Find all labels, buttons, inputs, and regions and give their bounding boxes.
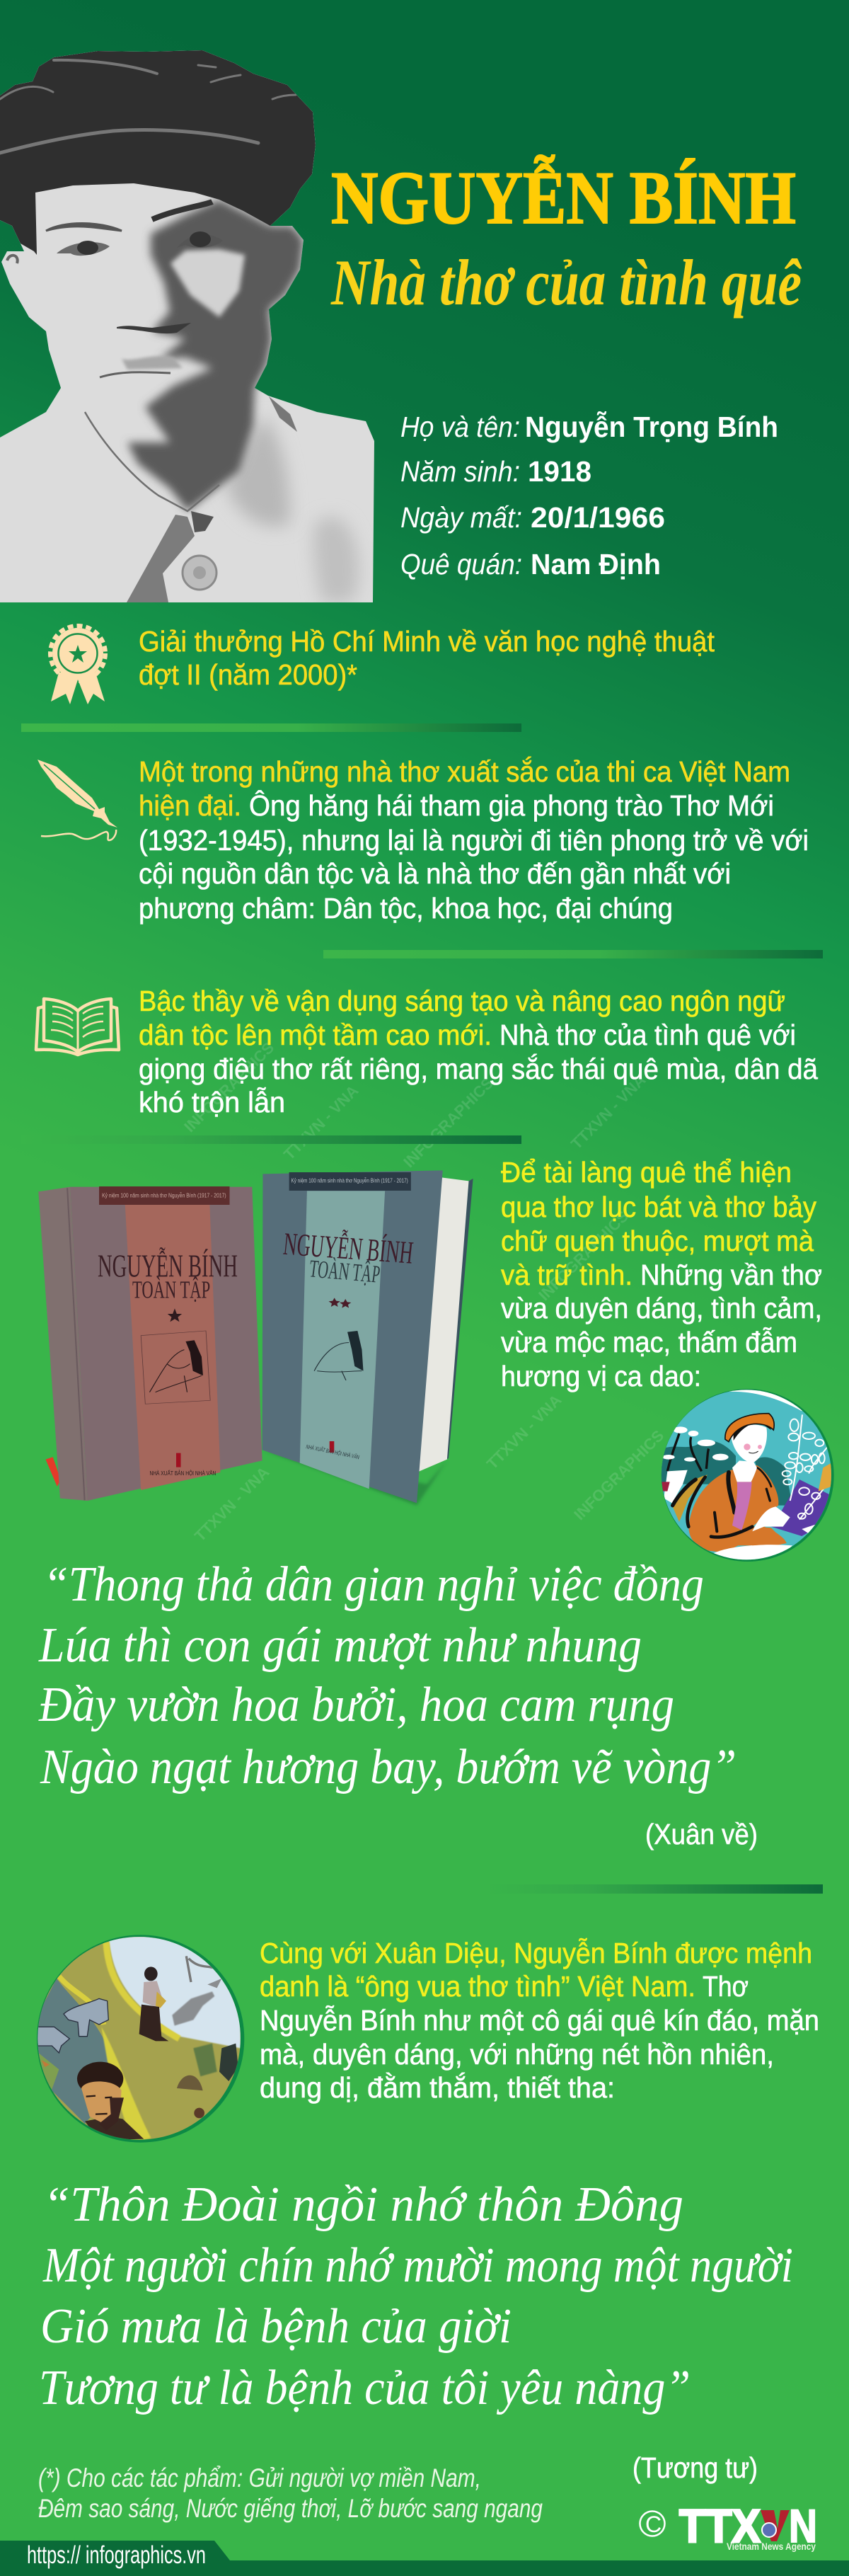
book volume 2: NGUYỄN BÍNH — [282, 1225, 415, 1271]
portrait of Nguyễn Bính — [0, 42, 382, 609]
icon: open book — [36, 999, 119, 1055]
paragraph: language master: khó trộn lẫn — [139, 1086, 285, 1118]
books: Nguyễn Bính toàn tập — [38, 1170, 473, 1506]
watermarks — [180, 1038, 667, 1545]
footer bar — [0, 2541, 849, 2576]
paragraph: king of love poetry: mà, duyên dáng, với những nét hồn nhiên, — [260, 2038, 774, 2071]
book volume 1: NGUYỄN BÍNH — [98, 1247, 238, 1283]
logo: TTXVN Vietnam News Agency: N — [789, 2500, 817, 2552]
book volume 2: TOÀN TẬP — [308, 1254, 381, 1288]
illustration: woman in round frame — [658, 1385, 837, 1562]
button — [183, 556, 216, 590]
paragraph: king of love poetry: Thơ — [703, 1970, 749, 2003]
logo: TTXVN Vietnam News Agency: TTX — [679, 2500, 761, 2552]
poem: Xuân về: Đầy vườn hoa bưởi, hoa cam rụng — [38, 1678, 674, 1732]
watermarks: TTXVN - VNA — [191, 1463, 272, 1545]
paragraph: modern poet — [139, 755, 809, 925]
shirt shading — [226, 418, 359, 602]
personal information: Họ và tên: — [400, 411, 520, 443]
footnote: Đêm sao sáng, Nước giếng thơi, Lỡ bước sang ngang — [38, 2494, 543, 2523]
left ear detail — [7, 256, 18, 263]
watermarks: INFOGRAPHICS — [570, 1426, 667, 1523]
paragraph: village theme: và trữ tình. — [501, 1259, 633, 1291]
poem: Tương tư: Tương tư là bệnh của tôi yêu nàng” — [39, 2361, 691, 2415]
paragraph: language master — [139, 985, 818, 1118]
paragraph: village theme: qua thơ lục bát và thơ bảy — [501, 1191, 816, 1223]
paragraph: modern poet: phương châm: Dân tộc, khoa học, đại chúng — [139, 892, 673, 925]
divider — [21, 1135, 521, 1144]
paragraph: village theme: Để tài làng quê thể hiện — [501, 1156, 792, 1189]
watermarks: TTXVN - VNA — [567, 1071, 649, 1152]
poem source: Tương tư: (Tương tư) — [633, 2451, 758, 2484]
paragraph: village theme — [501, 1156, 822, 1392]
face shadow — [127, 200, 304, 511]
paragraph: modern poet: hiện đại. — [139, 789, 241, 822]
divider — [487, 1884, 823, 1894]
personal information — [400, 411, 778, 580]
poem: Xuân về: “Thong thả dân gian nghỉ việc đồng — [43, 1557, 704, 1612]
paragraph: village theme: vừa mộc mạc, thấm đẫm — [501, 1326, 797, 1358]
paragraph: language master: Nhà thơ của tình quê với — [499, 1019, 796, 1051]
hat folds — [0, 60, 296, 153]
footnote: (*) Cho các tác phẩm: Gửi người vợ miền Nam, — [38, 2463, 481, 2492]
personal information: Năm sinh: — [400, 455, 520, 488]
tie — [127, 515, 195, 602]
poem source: Xuân về: (Xuân về) — [645, 1818, 758, 1850]
book volume 1: NHÀ XUẤT BẢN HỘI NHÀ VĂN — [149, 1470, 216, 1477]
logo: TTXVN Vietnam News Agency — [640, 2500, 817, 2552]
logo: TTXVN Vietnam News Agency: Vietnam News Agency — [727, 2541, 816, 2552]
poem: Tương tư: Gió mưa là bệnh của giời — [40, 2299, 512, 2354]
divider — [323, 950, 823, 958]
book volume 1: Kỷ niệm 100 năm sinh nhà thơ Nguyễn Bính (1917 - 2017) — [102, 1193, 226, 1198]
icon: feather quill — [37, 760, 117, 840]
footnote — [38, 2463, 543, 2523]
divider — [21, 723, 521, 732]
paragraph: modern poet: cội nguồn dân tộc và là nhà thơ đến gần nhất với — [139, 857, 731, 890]
book volume 2: NHÀ XUẤT BẢN HỘI NHÀ VĂN — [305, 1443, 361, 1460]
footer url: https:// infographics.vn — [27, 2541, 206, 2569]
hat — [0, 50, 316, 255]
paragraph: modern poet: (1932-1945), nhưng lại là người đi tiên phong trở về với — [139, 824, 809, 857]
watermarks: TTXVN - VNA — [483, 1391, 565, 1472]
logo: TTXVN Vietnam News Agency: C — [645, 2512, 662, 2537]
paragraph: village theme: hương vị ca dao: — [501, 1360, 701, 1392]
award text — [139, 625, 715, 691]
award text: Giải thưởng Hồ Chí Minh về văn học nghệ thuật — [139, 625, 715, 658]
personal information: Ngày mất: — [400, 501, 522, 534]
personal information: 20/1/1966 — [531, 501, 665, 534]
paragraph: king of love poetry — [260, 1937, 819, 2104]
watermarks: INFOGRAPHICS — [535, 1207, 632, 1304]
book volume 1 — [38, 1186, 262, 1501]
book volume 2 — [262, 1170, 473, 1506]
cheek highlight — [171, 249, 245, 317]
watermarks: INFOGRAPHICS — [180, 1038, 277, 1135]
collar — [85, 412, 219, 511]
paragraph: village theme: Những vần thơ — [640, 1259, 822, 1291]
poem: Xuân về: Lúa thì con gái mượt như nhung — [38, 1618, 642, 1673]
paragraph: language master: Bậc thầy về vận dụng sáng tạo và nâng cao ngôn ngữ — [139, 985, 785, 1017]
paragraph: king of love poetry: Nguyễn Bính như một cô gái quê kín đáo, mặn — [260, 2004, 819, 2037]
paragraph: king of love poetry: Cùng với Xuân Diệu, Nguyễn Bính được mệnh — [260, 1937, 812, 1969]
award text: đợt II (năm 2000)* — [139, 658, 357, 691]
personal information: Quê quán: — [400, 548, 522, 580]
watermarks: INFOGRAPHICS — [400, 1074, 497, 1171]
paragraph: king of love poetry: dung dị, đằm thắm, thiết tha: — [260, 2071, 615, 2104]
paragraph: modern poet: Ông hăng hái tham gia phong trào Thơ Mới — [249, 789, 774, 822]
paragraph: king of love poetry: danh là “ông vua thơ tình” Việt Nam. — [260, 1970, 695, 2003]
poem: Tương tư — [39, 2177, 793, 2415]
poem: Tương tư: “Thôn Đoài ngồi nhớ thôn Đông — [43, 2177, 683, 2232]
paragraph: village theme: vừa duyên dáng, tình cảm, — [501, 1292, 822, 1324]
illustration: poet and country road in round frame — [35, 1935, 244, 2143]
personal information: Nguyễn Trọng Bính — [525, 411, 778, 443]
paragraph: village theme: chữ quen thuộc, mượt mà — [501, 1225, 814, 1257]
paragraph: language master: giọng điệu thơ rất riêng, mang sắc thái quê mùa, dân dã — [139, 1053, 818, 1085]
book volume 1: TOÀN TẬP — [132, 1276, 210, 1303]
poem: Xuân về — [38, 1557, 737, 1794]
paragraph: modern poet: Một trong những nhà thơ xuất sắc của thi ca Việt Nam — [139, 755, 790, 788]
eyes and brows — [46, 202, 223, 377]
personal information: 1918 — [528, 455, 591, 488]
personal information: Nam Định — [531, 548, 661, 580]
paragraph: language master: dân tộc lên một tầm cao mới. — [139, 1019, 492, 1051]
watermarks: TTXVN - VNA — [280, 1082, 362, 1163]
poem: Xuân về: Ngào ngạt hương bay, bướm vẽ vòng” — [40, 1740, 737, 1794]
icon: award medal — [50, 626, 105, 704]
book volume 2: Kỷ niệm 100 năm sinh nhà thơ Nguyễn Bính (1917 - 2017) — [291, 1178, 408, 1184]
